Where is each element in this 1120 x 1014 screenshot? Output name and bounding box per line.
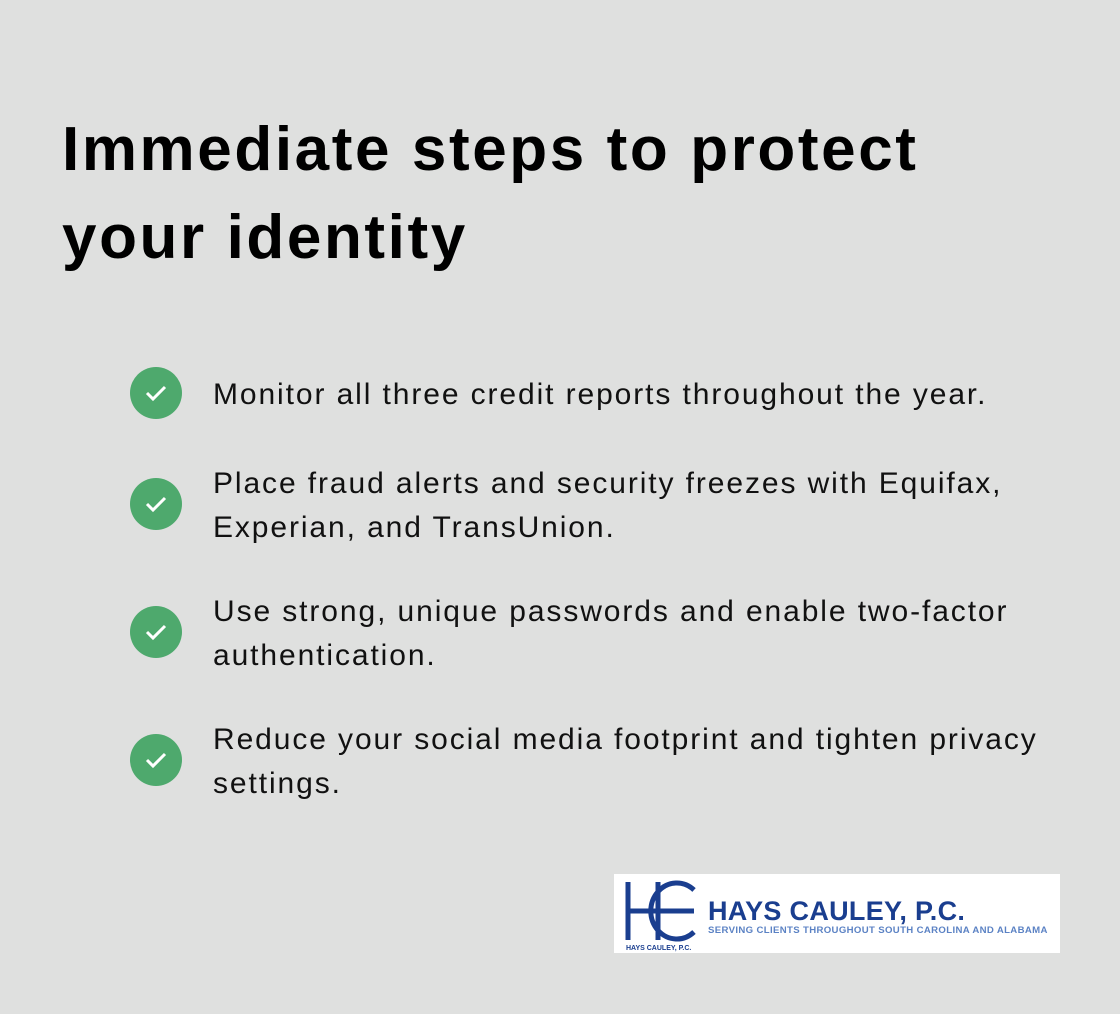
icon: check: [130, 734, 182, 786]
logo: SERVING CLIENTS THROUGHOUT SOUTH CAROLINA AND ALABAMA: [708, 925, 1048, 936]
logo: HAYS CAULEY, P.C.: [708, 896, 965, 926]
text 1: Monitor all three credit reports throughout the year.: [213, 378, 987, 411]
text 2: Place fraud alerts and security freezes with Equifax, Experian, and TransUnion.: [213, 467, 1002, 544]
logo: HAYS CAULEY, P.C.: [626, 945, 691, 952]
text 4: Reduce your social media footprint and tighten privacy settings.: [213, 723, 1038, 800]
icon: check: [130, 367, 182, 419]
item 2: [130, 467, 1002, 544]
item 1: [130, 367, 987, 419]
title: Immediate steps to protect: [62, 115, 919, 184]
logo: [614, 874, 1060, 953]
item 3: [130, 595, 1008, 672]
title: [62, 115, 919, 272]
icon: check: [130, 606, 182, 658]
icon: check: [130, 478, 182, 530]
text 3: Use strong, unique passwords and enable two-factor authentication.: [213, 595, 1008, 672]
item 4: [130, 723, 1038, 800]
title: your identity: [62, 203, 468, 272]
icon: HC monogram: [628, 882, 694, 940]
